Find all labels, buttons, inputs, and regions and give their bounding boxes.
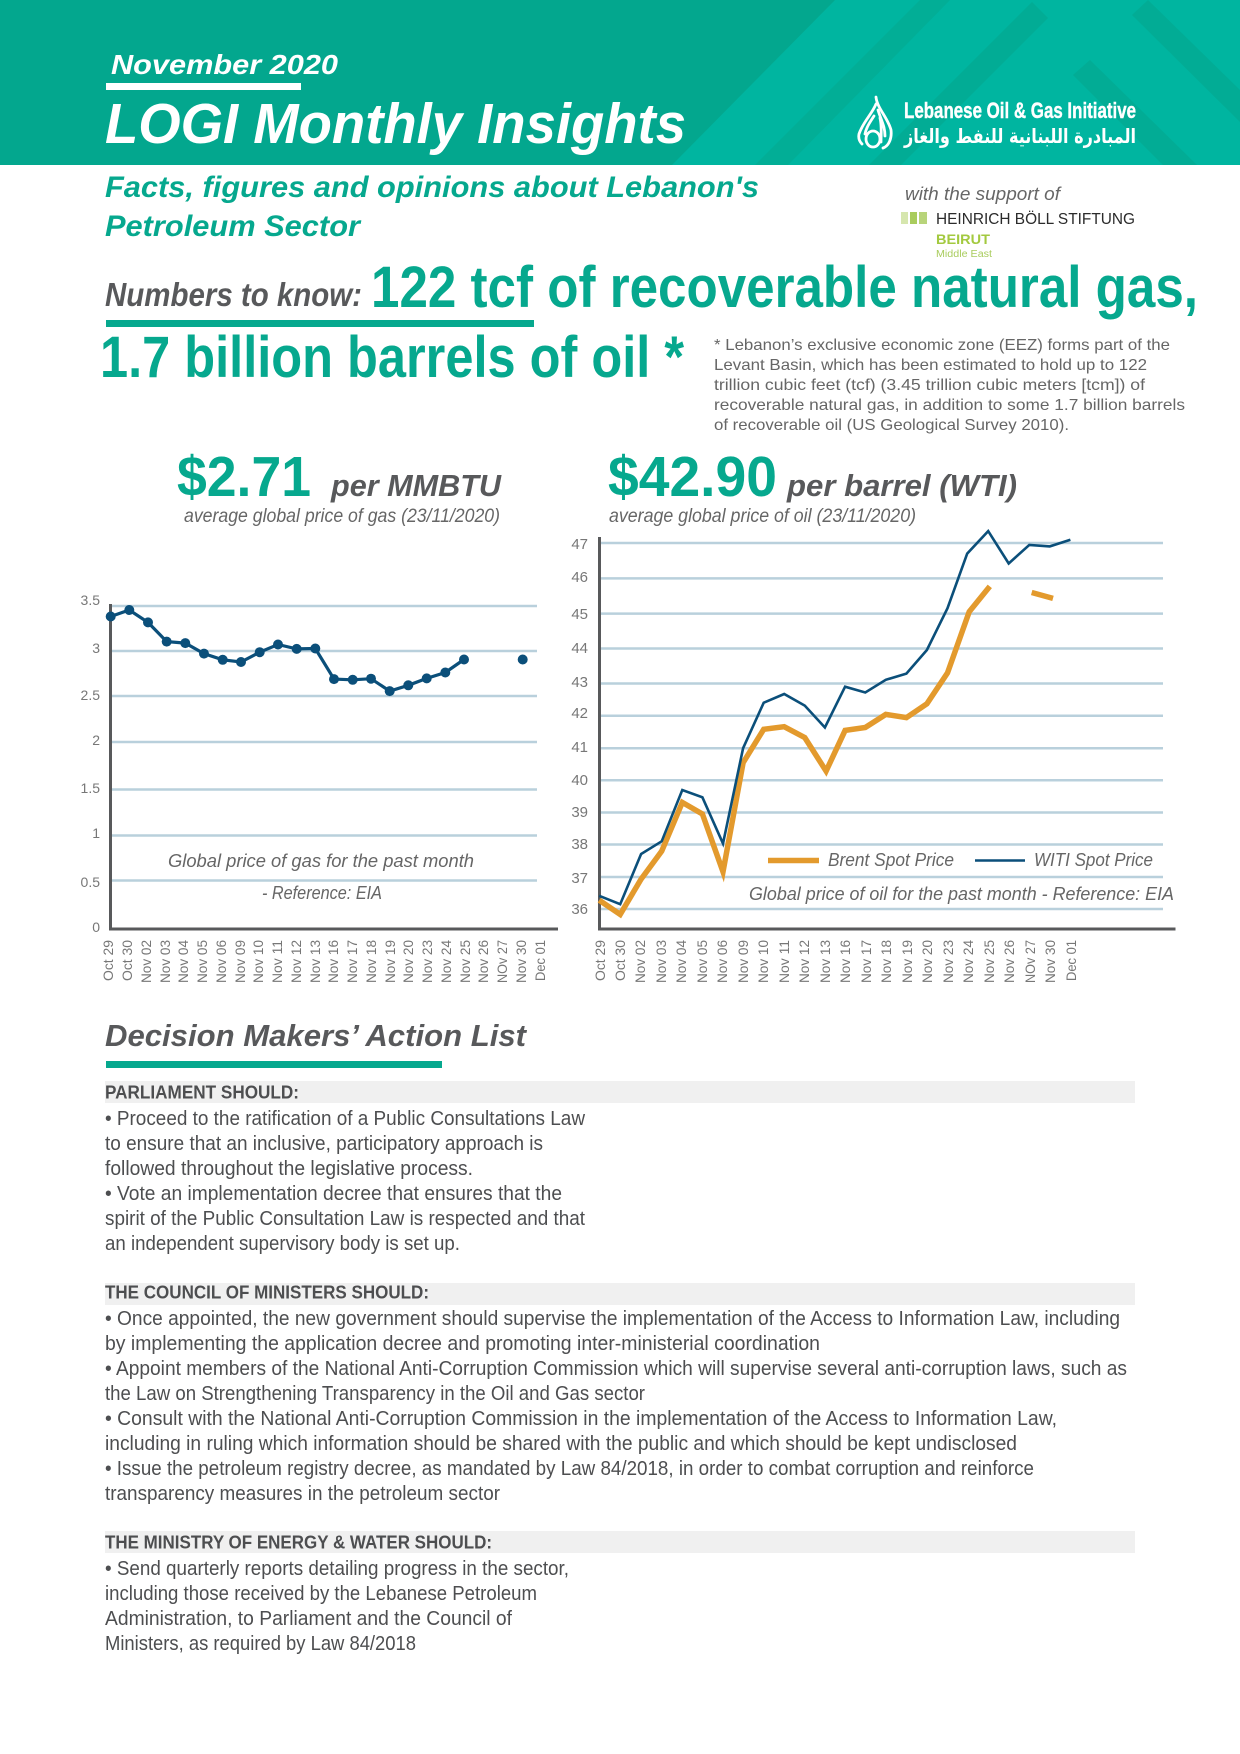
oil x axis labels: Nov 03 bbox=[653, 940, 669, 983]
oil x axis labels: Nov 05 bbox=[694, 940, 710, 983]
oil y axis labels: 44 bbox=[571, 640, 588, 657]
gas x axis labels: Nov 10 bbox=[250, 940, 266, 983]
gas x axis labels bbox=[100, 940, 548, 983]
ministry recommendations: • Send quarterly reports detailing progress in the sector, bbox=[105, 1558, 569, 1580]
oil y axis labels: 41 bbox=[571, 739, 588, 756]
gas x axis labels: Oct 30 bbox=[119, 940, 135, 981]
oil price caption: average global price of oil (23/11/2020) bbox=[609, 506, 916, 527]
council heading bbox=[105, 1282, 1135, 1305]
gas x axis labels: Nov 17 bbox=[344, 940, 360, 983]
foundation city: BEIRUT bbox=[936, 231, 990, 247]
WTI series bbox=[599, 531, 1070, 904]
panel: ministry of energy bbox=[105, 1531, 1135, 1655]
footnote: Levant Basin, which has been estimated to hold up to 122 bbox=[714, 357, 1147, 374]
gas x axis labels: Nov 20 bbox=[400, 940, 416, 983]
parliament recommendations bbox=[105, 1108, 586, 1255]
parliament heading: PARLIAMENT SHOULD: bbox=[105, 1082, 299, 1102]
ministry heading bbox=[105, 1531, 1135, 1553]
oil x axis labels: Nov 26 bbox=[1001, 940, 1017, 983]
oil legend bbox=[768, 850, 1153, 870]
oil x axis labels: Nov 24 bbox=[960, 940, 976, 983]
oil y axis labels: 43 bbox=[571, 674, 588, 691]
chart: oil price line chart bbox=[571, 531, 1176, 983]
panel: council of ministers bbox=[105, 1282, 1135, 1505]
council recommendations: • Consult with the National Anti-Corruption Commission in the implementation of the Access to Information Law, bbox=[105, 1408, 1057, 1430]
council recommendations bbox=[105, 1308, 1127, 1505]
ministry recommendations: Administration, to Parliament and the Council of bbox=[105, 1608, 512, 1630]
oil y axis labels: 36 bbox=[571, 901, 588, 918]
subtitle bbox=[105, 171, 759, 243]
gas x axis labels: Nov 03 bbox=[157, 940, 173, 983]
gas x axis labels: Nov 16 bbox=[325, 940, 341, 983]
panel: parliament bbox=[105, 1081, 1135, 1255]
oil y axis labels: 46 bbox=[571, 569, 588, 586]
gas y axis labels bbox=[81, 592, 100, 935]
oil x axis labels: Nov 18 bbox=[878, 940, 894, 983]
oil x axis labels: Nov 20 bbox=[919, 940, 935, 983]
gas y axis labels: 0 bbox=[92, 919, 100, 935]
header banner bbox=[0, 0, 1240, 165]
oil x axis labels: Nov 25 bbox=[981, 940, 997, 983]
oil price figure: per barrel (WTI) bbox=[786, 468, 1017, 503]
oil x axis labels: Oct 30 bbox=[612, 940, 628, 981]
oil x axis labels: Nov 02 bbox=[632, 940, 648, 983]
gas x axis labels: Nov 18 bbox=[363, 940, 379, 983]
icon: HBS bars bbox=[901, 212, 927, 224]
oil x axis labels: Dec 01 bbox=[1063, 940, 1079, 981]
gas y axis labels: 2 bbox=[92, 732, 100, 748]
council recommendations: including in ruling which information should be shared with the public and which should be kept undisclosed bbox=[105, 1433, 1017, 1455]
icon: flame bbox=[859, 97, 891, 148]
parliament recommendations: • Proceed to the ratification of a Public Consultations Law bbox=[105, 1108, 586, 1130]
gas x axis labels: Nov 23 bbox=[419, 940, 435, 983]
oil x axis labels: NOv 27 bbox=[1022, 940, 1038, 983]
foundation name: HEINRICH BÖLL STIFTUNG bbox=[936, 210, 1135, 228]
oil x axis labels: Nov 11 bbox=[776, 940, 792, 983]
oil chart note: Global price of oil for the past month - Reference: EIA bbox=[749, 884, 1174, 904]
oil y axis labels: 40 bbox=[571, 772, 588, 789]
headline underline bbox=[106, 320, 534, 327]
footnote: trillion cubic feet (tcf) (3.45 trillion cubic meters [tcm]) of bbox=[714, 377, 1146, 394]
date: November 2020 bbox=[111, 49, 338, 80]
subtitle: Facts, figures and opinions about Lebanon's bbox=[105, 171, 759, 204]
gas y axis labels: 2.5 bbox=[81, 687, 100, 703]
parliament recommendations: spirit of the Public Consultation Law is respected and that bbox=[105, 1208, 585, 1230]
parliament recommendations: an independent supervisory body is set up. bbox=[105, 1233, 460, 1255]
title: LOGI Monthly Insights bbox=[105, 92, 686, 156]
logo english name: Lebanese Oil & Gas Initiative bbox=[904, 98, 1136, 123]
oil x axis labels: Nov 10 bbox=[755, 940, 771, 983]
oil x axis labels: Nov 06 bbox=[714, 940, 730, 983]
footnote: of recoverable oil (US Geological Survey 2010). bbox=[714, 417, 1069, 434]
oil x axis labels: Nov 13 bbox=[817, 940, 833, 983]
action list heading: Decision Makers’ Action List bbox=[105, 1018, 528, 1053]
gas price figure: per MMBTU bbox=[330, 468, 503, 503]
gas x axis labels: Nov 25 bbox=[457, 940, 473, 983]
parliament heading bbox=[105, 1081, 1135, 1103]
parliament recommendations: followed throughout the legislative process. bbox=[105, 1158, 473, 1180]
gas x axis labels: Dec 01 bbox=[532, 940, 548, 981]
ministry recommendations: including those received by the Lebanese Petroleum bbox=[105, 1583, 537, 1605]
gas x axis labels: Nov 30 bbox=[513, 940, 529, 983]
gas chart note bbox=[168, 851, 474, 903]
oil y axis labels: 39 bbox=[571, 804, 588, 821]
gas x axis labels: Nov 11 bbox=[269, 940, 285, 983]
oil y axis labels: 47 bbox=[571, 536, 588, 553]
council recommendations: by implementing the application decree and promoting inter-ministerial coordination bbox=[105, 1333, 820, 1355]
oil price figure: $42.90 bbox=[608, 445, 777, 509]
oil x axis labels: Nov 12 bbox=[796, 940, 812, 983]
gas x axis labels: NOv 27 bbox=[494, 940, 510, 983]
gas x axis labels: Nov 19 bbox=[382, 940, 398, 983]
gas y axis labels: 0.5 bbox=[81, 874, 100, 890]
ministry heading: THE MINISTRY OF ENERGY & WATER SHOULD: bbox=[105, 1532, 492, 1552]
gas price figure bbox=[177, 445, 503, 509]
subtitle: Petroleum Sector bbox=[105, 210, 362, 243]
gas y axis labels: 1 bbox=[92, 825, 100, 841]
ministry recommendations: Ministers, as required by Law 84/2018 bbox=[105, 1633, 416, 1655]
council recommendations: • Appoint members of the National Anti-Corruption Commission which will supervise several anti-corruption laws, such as bbox=[105, 1358, 1127, 1380]
parliament recommendations: to ensure that an inclusive, participatory approach is bbox=[105, 1133, 543, 1155]
gas y axis labels: 3 bbox=[92, 640, 100, 656]
oil legend: Brent Spot Price bbox=[828, 850, 954, 870]
oil x axis labels: Nov 30 bbox=[1042, 940, 1058, 983]
gas chart note: Global price of gas for the past month bbox=[168, 851, 474, 871]
gas price caption: average global price of gas (23/11/2020) bbox=[184, 506, 500, 527]
supporter block bbox=[901, 184, 1135, 260]
action list underline bbox=[106, 1061, 442, 1068]
oil x axis labels: Nov 04 bbox=[673, 940, 689, 983]
gas x axis labels: Nov 02 bbox=[138, 940, 154, 983]
date underline bbox=[106, 83, 301, 90]
council recommendations: transparency measures in the petroleum sector bbox=[105, 1483, 500, 1505]
logo arabic name: المبادرة اللبنانية للنفط والغاز bbox=[903, 124, 1136, 148]
oil legend: WITI Spot Price bbox=[1034, 850, 1153, 870]
oil x axis labels bbox=[592, 940, 1079, 983]
oil y axis labels bbox=[571, 536, 588, 918]
footnote: recoverable natural gas, in addition to some 1.7 billion barrels bbox=[714, 397, 1185, 414]
gas x axis labels: Nov 05 bbox=[194, 940, 210, 983]
gas chart note: - Reference: EIA bbox=[262, 883, 382, 903]
headline numbers line 2: 1.7 billion barrels of oil * bbox=[100, 325, 684, 390]
gas x axis labels: Oct 29 bbox=[100, 940, 116, 981]
brent series bbox=[599, 586, 1053, 914]
council recommendations: • Once appointed, the new government should supervise the implementation of the Access to Information Law, including bbox=[105, 1308, 1120, 1330]
gas x axis labels: Nov 24 bbox=[438, 940, 454, 983]
gas x axis labels: Nov 12 bbox=[288, 940, 304, 983]
footnote bbox=[714, 337, 1185, 434]
gas chart axes bbox=[110, 604, 558, 929]
gas price figure: $2.71 bbox=[177, 445, 311, 509]
council heading: THE COUNCIL OF MINISTERS SHOULD: bbox=[105, 1282, 429, 1302]
ministry recommendations bbox=[105, 1558, 569, 1655]
support caption: with the support of bbox=[905, 184, 1062, 204]
gas x axis labels: Nov 09 bbox=[232, 940, 248, 983]
oil chart axes bbox=[600, 537, 1176, 929]
gas y axis labels: 3.5 bbox=[81, 592, 100, 608]
chart: gas price line chart bbox=[81, 592, 558, 983]
foundation region: Middle East bbox=[936, 249, 992, 260]
council recommendations: the Law on Strengthening Transparency in the Oil and Gas sector bbox=[105, 1383, 645, 1405]
gas x axis labels: Nov 26 bbox=[475, 940, 491, 983]
oil y axis labels: 37 bbox=[571, 870, 588, 887]
numbers to know label: Numbers to know: bbox=[105, 276, 362, 313]
parliament recommendations: • Vote an implementation decree that ensures that the bbox=[105, 1183, 562, 1205]
gas x axis labels: Nov 13 bbox=[307, 940, 323, 983]
oil price figure bbox=[608, 445, 1017, 509]
oil x axis labels: Nov 09 bbox=[735, 940, 751, 983]
oil x axis labels: Nov 17 bbox=[858, 940, 874, 983]
oil y axis labels: 38 bbox=[571, 836, 588, 853]
gas price series bbox=[106, 605, 528, 696]
gas y axis labels: 1.5 bbox=[81, 780, 100, 796]
council recommendations: • Issue the petroleum registry decree, as mandated by Law 84/2018, in order to combat corruption and reinforce bbox=[105, 1458, 1034, 1480]
oil x axis labels: Oct 29 bbox=[592, 940, 608, 981]
footnote: * Lebanon’s exclusive economic zone (EEZ) forms part of the bbox=[714, 337, 1170, 354]
logo: Lebanese Oil & Gas Initiative bbox=[859, 97, 1136, 148]
gas x axis labels: Nov 06 bbox=[213, 940, 229, 983]
oil y axis labels: 42 bbox=[571, 705, 588, 722]
oil x axis labels: Nov 23 bbox=[940, 940, 956, 983]
oil y axis labels: 45 bbox=[571, 606, 588, 623]
gas x axis labels: Nov 04 bbox=[175, 940, 191, 983]
oil x axis labels: Nov 19 bbox=[899, 940, 915, 983]
oil x axis labels: Nov 16 bbox=[837, 940, 853, 983]
